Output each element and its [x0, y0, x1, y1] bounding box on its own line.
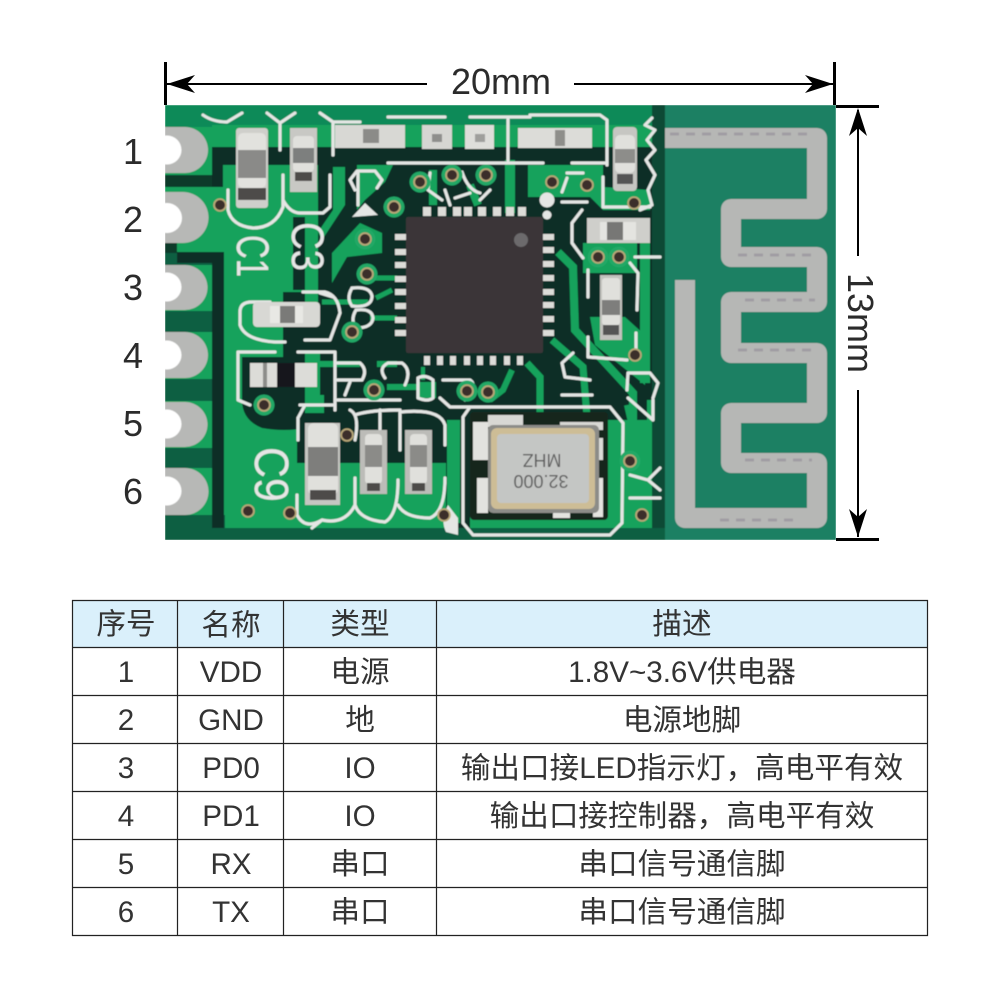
crystal oscillator 32.000 MHZ: 32.000 — [513, 471, 569, 491]
width dimension: 20mm — [164, 61, 836, 105]
main IC chip — [406, 217, 543, 353]
chip pins — [395, 207, 554, 365]
row 6: TX — [212, 896, 250, 929]
silkscreen labels: C3 — [282, 222, 333, 271]
small vias — [213, 164, 649, 522]
row 4: PD1 — [202, 800, 260, 833]
row 2: 电源地脚 — [623, 704, 741, 737]
SMD components — [236, 125, 650, 505]
header row: 名称 — [201, 609, 261, 642]
row 4 — [118, 800, 874, 833]
pin numbers: 1 — [123, 131, 143, 172]
header row: 序号 — [96, 608, 156, 641]
row 1: 电源 — [330, 656, 390, 689]
antenna section substrate — [652, 105, 665, 540]
row 6: 6 — [118, 896, 134, 929]
row 4: IO — [344, 800, 376, 833]
row 5: 串口信号通信脚 — [578, 848, 786, 881]
row 1 — [118, 656, 796, 689]
row 3: PD0 — [202, 752, 260, 785]
board base — [165, 105, 653, 128]
bright green copper area — [212, 125, 652, 528]
table grid — [72, 600, 928, 936]
crystal oscillator 32.000 MHZ — [470, 412, 608, 520]
height dimension: 13mm — [836, 105, 881, 541]
row 6: 串口 — [330, 896, 390, 929]
pin numbers: 6 — [123, 471, 143, 512]
antenna trace — [665, 134, 817, 520]
row 1: 1 — [118, 656, 134, 689]
pin numbers — [123, 131, 143, 512]
silkscreen labels — [236, 223, 325, 501]
row 5: 串口 — [330, 848, 390, 881]
row 2: 2 — [118, 704, 134, 737]
header row — [96, 608, 712, 642]
pad fingers — [165, 127, 225, 540]
silkscreen lines — [203, 113, 660, 535]
table header background — [72, 600, 927, 648]
row 1: VDD — [200, 656, 262, 689]
row 3: IO — [344, 752, 376, 785]
silkscreen labels: C9 — [244, 447, 298, 502]
pin numbers: 5 — [123, 403, 143, 444]
row 4: 4 — [118, 800, 134, 833]
width dimension: 20mm: 20mm — [451, 61, 551, 102]
castellated pads — [165, 126, 210, 516]
row 3 — [118, 752, 903, 785]
row 2: 地 — [345, 704, 375, 737]
crystal oscillator 32.000 MHZ: MHZ — [522, 450, 562, 470]
header row: 类型 — [330, 608, 390, 641]
header row: 描述 — [652, 608, 712, 641]
pin numbers: 4 — [123, 335, 143, 376]
row 6: 串口信号通信脚 — [578, 896, 786, 929]
row 5: RX — [210, 848, 252, 881]
pin description table — [72, 600, 928, 936]
row 2 — [118, 704, 741, 737]
height dimension: 13mm: 13mm — [840, 273, 881, 373]
row 6 — [118, 896, 786, 929]
dark copper pours — [212, 147, 652, 530]
PCB module photo — [152, 105, 836, 540]
row 4: 输出口接控制器，高电平有效 — [490, 800, 874, 833]
row 5: 5 — [118, 848, 134, 881]
silkscreen labels: C1 — [227, 235, 277, 277]
bright green traces over dark — [305, 160, 652, 530]
row 5 — [118, 848, 786, 881]
row 3: 3 — [118, 752, 134, 785]
row 3: 输出口接LED指示灯，高电平有效 — [461, 752, 903, 785]
row 2: GND — [198, 704, 264, 737]
pin numbers: 2 — [123, 199, 143, 240]
pin numbers: 3 — [123, 267, 143, 308]
row 1: 1.8V~3.6V供电器 — [568, 656, 796, 689]
